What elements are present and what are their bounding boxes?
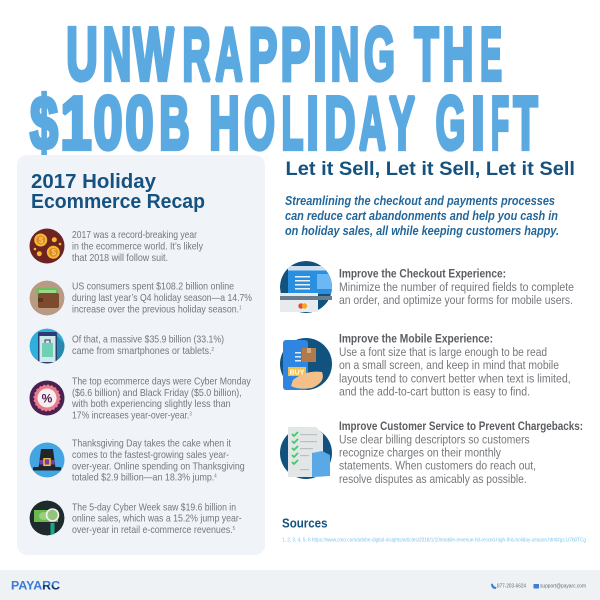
recap text 4: The top ecommerce days were Cyber Monday xyxy=(72,376,251,388)
recap text 5: comes to the fastest-growing sales year- xyxy=(72,450,229,461)
recap text 6 xyxy=(72,502,242,536)
title: N xyxy=(103,12,131,96)
recap text 4: with both experiencing slightly less than xyxy=(71,399,231,410)
panel heading xyxy=(31,171,205,213)
panel: 2017 holiday ecommerce recap xyxy=(17,155,265,555)
title: G xyxy=(364,12,395,96)
title: P xyxy=(249,12,277,96)
recap text 2: during last year’s Q4 holiday season—a 14.7% xyxy=(72,293,252,304)
recap text 4: 3 xyxy=(189,412,192,418)
logo: PAYARC xyxy=(12,581,60,590)
footer xyxy=(0,570,600,600)
recap text 3: 2 xyxy=(212,347,214,353)
tip: mobile experience: Improve the Mobile Experience: xyxy=(339,332,493,346)
title: F xyxy=(491,82,509,166)
title: E xyxy=(480,14,502,97)
icon: percent badge: % xyxy=(42,391,53,405)
intro text: Streamlining the checkout and payments processes xyxy=(285,194,555,208)
title xyxy=(30,12,538,166)
title: I xyxy=(471,83,485,165)
recap text 2: 1 xyxy=(239,305,242,311)
recap text 4 xyxy=(71,376,251,422)
email contact: support@payarc.com xyxy=(540,584,586,590)
recap text 1 xyxy=(72,230,204,264)
title: $ xyxy=(30,82,58,165)
title: A xyxy=(215,12,243,96)
recap text 6: over-year in retail e-commerce revenues. xyxy=(72,525,258,536)
recap text 3 xyxy=(72,335,224,357)
title: I xyxy=(313,14,327,96)
recap text 1: that 2018 will follow suit. xyxy=(72,253,168,264)
tip: customer service: Use clear billing descriptors so customers xyxy=(339,432,530,446)
title: O xyxy=(244,81,275,165)
intro text: on holiday sales, all while keeping customers happy. xyxy=(285,224,559,238)
tip: customer service: statements. When customers do reach out, xyxy=(339,459,536,473)
recap text 1: 2017 was a record-breaking year xyxy=(72,230,198,241)
icon: magnifier over cash xyxy=(30,500,64,537)
tip: checkout experience: Improve the Checkout Experience: xyxy=(339,266,506,280)
icon: coins xyxy=(30,228,64,264)
tip: customer service: recognize charges on their monthly xyxy=(339,446,502,460)
recap text 1: in the ecommerce world. It’s likely xyxy=(72,242,204,252)
title: I xyxy=(306,82,319,166)
recap text 5: Thanksgiving Day takes the cake when it xyxy=(72,439,231,450)
panel heading: 2017 Holiday xyxy=(31,171,157,193)
title: B xyxy=(159,81,190,165)
title: 1 xyxy=(60,82,92,166)
icon: mobile xyxy=(280,338,332,390)
icon: checkout xyxy=(280,261,334,313)
icon: wallet xyxy=(30,280,64,316)
sources heading: Sources xyxy=(282,516,328,530)
tip: customer service: resolve disputes as amicably as possible. xyxy=(339,472,527,486)
title: D xyxy=(325,81,355,165)
title: L xyxy=(282,82,303,165)
title: H xyxy=(209,81,240,165)
title: T xyxy=(513,81,538,165)
title: R xyxy=(182,12,211,96)
tip: mobile experience: layouts tend to convert better when text is limited, xyxy=(339,371,571,385)
title: Y xyxy=(389,81,415,165)
title: W xyxy=(133,12,174,96)
tip: mobile experience: and the add-to-cart button is easy to find. xyxy=(339,385,530,399)
title: H xyxy=(443,12,473,96)
title: A xyxy=(359,80,386,165)
recap text 4: 17% increases year-over-year. xyxy=(72,411,210,422)
panel heading: Ecommerce Recap xyxy=(31,191,205,213)
title: P xyxy=(281,13,310,97)
title: T xyxy=(414,12,439,96)
recap text 6: 5 xyxy=(233,526,235,532)
tip: mobile experience xyxy=(339,332,571,399)
intro text xyxy=(285,194,559,238)
icon: coins: $ xyxy=(52,248,56,257)
title: 0 xyxy=(125,81,154,165)
intro text: can reduce cart abandonments and help you cash in xyxy=(285,209,558,223)
logo: PAYARC: PAYARC xyxy=(11,580,60,592)
recap text 6: The 5-day Cyber Week saw $19.6 billion in xyxy=(72,502,236,513)
icon: mobile: BUY xyxy=(290,370,305,376)
phone contact: 877-203-6624 xyxy=(497,584,526,590)
tip: mobile experience: Use a font size that is large enough to be read xyxy=(339,345,547,359)
title: U xyxy=(66,13,98,96)
recap text 4: ($6.6 billion) and Black Friday ($5.0 billion), xyxy=(72,388,242,399)
recap text 3: came from smartphones or tablets. xyxy=(72,346,229,357)
sources link: 1, 2, 3, 4, 5, 6 https://www.cmo.com/adobe-digital-insights/articles/2018/1/10/mobile-revenue-hit-record-high-this-holiday-season.html#gs.U7b0TCg xyxy=(282,538,586,544)
recap text 3: Of that, a massive $35.9 billion (33.1%) xyxy=(72,335,224,346)
recap text 5: 4 xyxy=(214,474,217,480)
recap text 5 xyxy=(72,439,245,484)
icon: pilgrim hat xyxy=(30,442,64,478)
icon: coins: $ xyxy=(39,236,44,245)
recap text 5: over-year. Online spending on Thanksgiving xyxy=(72,461,245,472)
title: N xyxy=(331,12,359,96)
title: G xyxy=(436,81,465,165)
title: 0 xyxy=(93,82,123,165)
recap text 2 xyxy=(72,282,252,315)
icon: smartphone xyxy=(30,328,66,365)
tip: checkout experience xyxy=(339,266,574,307)
icon: billing checklist xyxy=(280,427,332,479)
recap text 6: online sales, which was a 15.2% jump year- xyxy=(72,514,242,525)
right heading: Let it Sell, Let it Sell, Let it Sell xyxy=(286,158,575,180)
tip: customer service xyxy=(339,419,583,486)
recap text 2: US consumers spent $108.2 billion online xyxy=(72,282,234,293)
icon: percent badge xyxy=(30,380,64,416)
logo: PAYARC: PAYARC xyxy=(11,580,60,592)
recap text 2: increase over the previous holiday season. xyxy=(72,304,265,315)
tip: mobile experience: on a small screen, and keep in mind that mobile xyxy=(339,358,559,372)
recap text 5: totaled $2.9 billion—an 18.3% jump. xyxy=(72,473,235,484)
